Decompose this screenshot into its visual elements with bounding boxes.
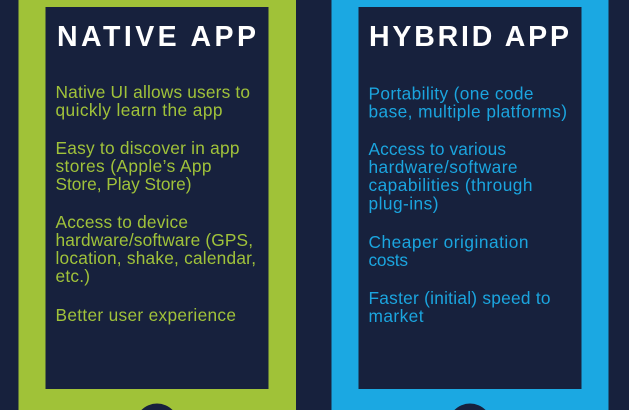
panel: hybrid app phone bbox=[332, 0, 608, 410]
benefit: capabilities: capabilities (through bbox=[368, 175, 532, 195]
benefit: portability bbox=[368, 84, 567, 122]
benefit: cost: costs bbox=[368, 250, 408, 270]
phone screen: native bbox=[46, 7, 268, 389]
benefit: device access: hardware/software (GPS, bbox=[56, 230, 253, 250]
benefit: portability: Portability (one code bbox=[368, 84, 534, 104]
benefit: capabilities: hardware/software bbox=[368, 157, 518, 177]
benefit: speed: Faster (initial) speed to bbox=[368, 288, 550, 308]
benefit: device access bbox=[56, 212, 256, 286]
benefit: cost bbox=[368, 232, 528, 270]
benefit: app stores: Easy to discover in app bbox=[56, 138, 240, 158]
benefit: portability: base, multiple platforms) bbox=[368, 102, 567, 122]
benefit: native UI bbox=[56, 82, 250, 120]
heading: hybrid app: HYBRID APP bbox=[369, 21, 569, 53]
phone screen: hybrid bbox=[358, 7, 582, 389]
text block: hybrid app benefits bbox=[368, 84, 567, 326]
benefit: device access: location, shake, calendar, bbox=[56, 248, 256, 268]
text block: native app benefits bbox=[56, 82, 256, 325]
benefit: speed bbox=[368, 288, 550, 326]
benefit: speed: market bbox=[368, 306, 424, 326]
benefit: app stores bbox=[56, 138, 240, 194]
phone home button: native bbox=[141, 404, 173, 410]
heading: native app: NATIVE APP bbox=[57, 21, 256, 53]
benefit: cost: Cheaper origination bbox=[368, 232, 528, 252]
panel: native app phone bbox=[18, 0, 296, 410]
benefit: capabilities: Access to various bbox=[368, 139, 506, 159]
benefit: user experience: Better user experience bbox=[56, 305, 236, 325]
phone home button: hybrid bbox=[454, 404, 486, 410]
benefit: capabilities: plug-ins) bbox=[368, 194, 438, 214]
benefit: capabilities bbox=[368, 139, 532, 214]
benefit: device access: etc.) bbox=[56, 266, 90, 286]
benefit: app stores: Store, Play Store) bbox=[56, 174, 192, 194]
benefit: device access: Access to device bbox=[56, 212, 188, 232]
phone body: native bbox=[18, 0, 296, 410]
benefit: native UI: quickly learn the app bbox=[56, 100, 222, 120]
benefit: app stores: stores (Apple’s App bbox=[56, 156, 212, 176]
phone body: hybrid bbox=[332, 0, 608, 410]
benefit: native UI: Native UI allows users to bbox=[56, 82, 250, 102]
